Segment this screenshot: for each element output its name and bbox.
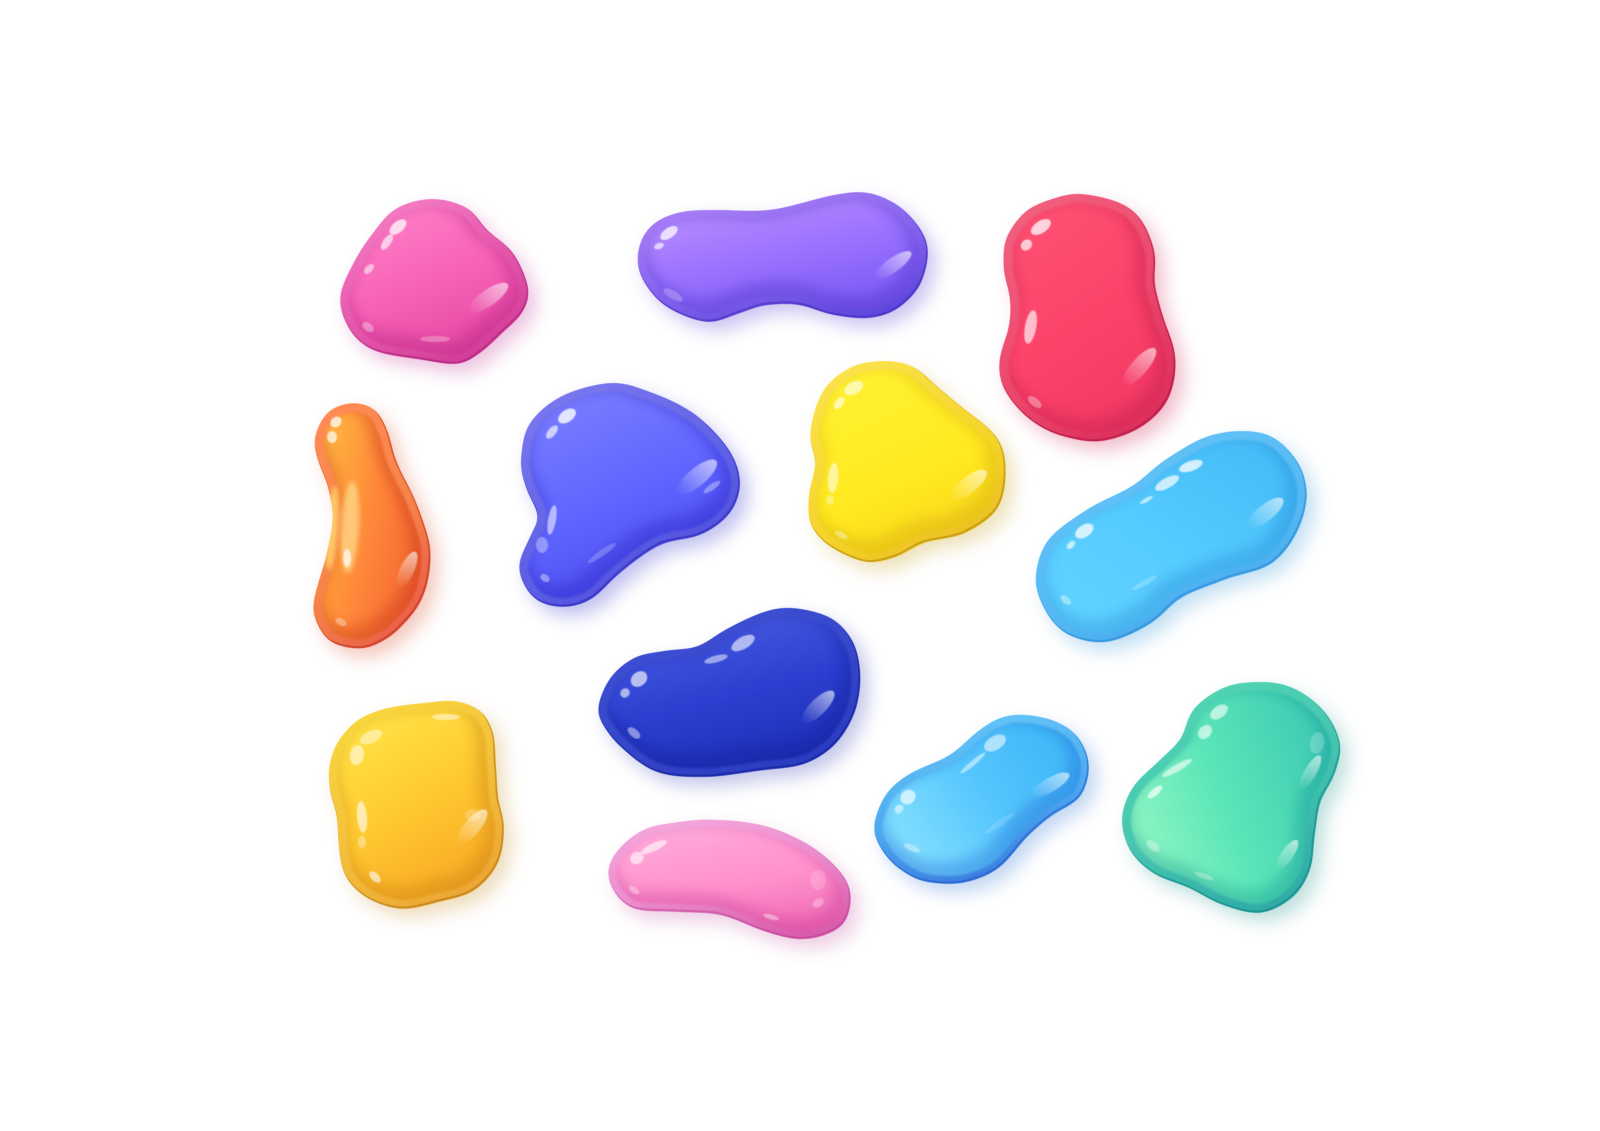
highlights: indigo [536, 405, 722, 584]
glow: orange left edge [323, 486, 341, 570]
highlights: green [1144, 701, 1326, 882]
highlights: small sky [893, 731, 1073, 855]
glow: orange inner streak [339, 481, 361, 573]
blob: yellow [803, 354, 1014, 572]
highlights: orange [327, 414, 422, 628]
blob: sky long [1030, 424, 1315, 652]
highlights: gold [348, 714, 492, 885]
blob: red [994, 187, 1184, 451]
highlights: pink [360, 216, 512, 342]
highlights: red [1018, 216, 1161, 410]
highlights: yellow [826, 378, 991, 541]
blob: green [1117, 675, 1349, 922]
blob: pink [335, 192, 537, 373]
blob: indigo [514, 376, 748, 616]
highlights: purple [653, 223, 915, 304]
highlights: light pink [627, 837, 826, 921]
highlights: sky long [1059, 457, 1288, 607]
blob: small sky [869, 708, 1097, 893]
blob: light pink [603, 813, 859, 948]
highlights: navy [618, 631, 839, 741]
blob: gold [324, 694, 512, 918]
blob: orange [308, 396, 439, 658]
blob: navy [593, 601, 868, 786]
blob: purple [633, 185, 936, 331]
